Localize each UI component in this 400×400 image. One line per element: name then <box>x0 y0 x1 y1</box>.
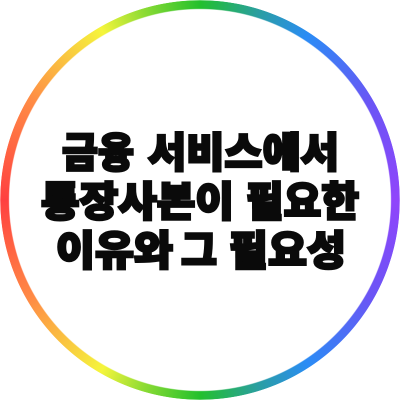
title: 그 <box>181 228 217 274</box>
title: 서비스에서 <box>148 130 339 176</box>
title: 필요한 <box>246 179 359 225</box>
title: 이유와 <box>56 228 173 274</box>
title: 필요성 <box>229 228 346 274</box>
title: 통장사본이 <box>41 179 234 225</box>
title: 금융 <box>62 130 134 176</box>
